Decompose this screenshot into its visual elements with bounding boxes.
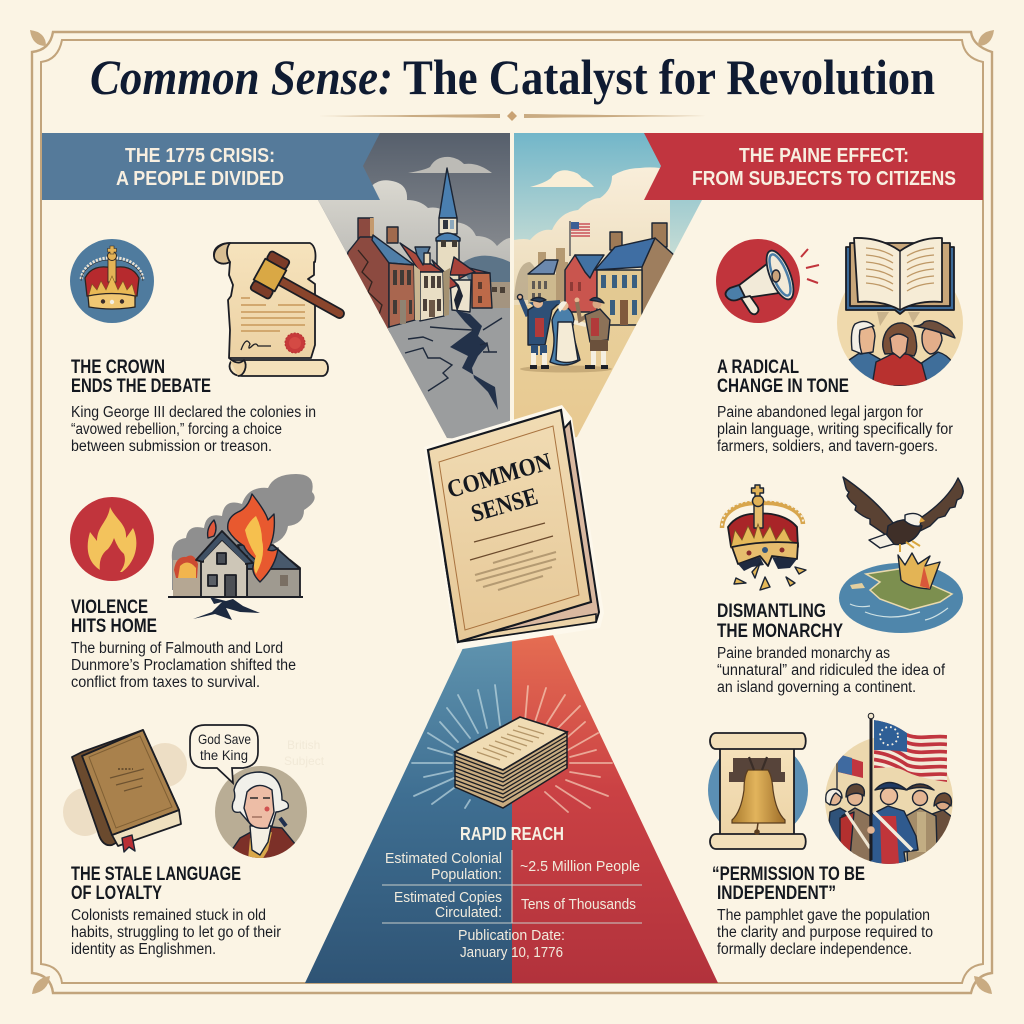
background houses [514, 262, 535, 300]
icon: colonial soldiers with flag [825, 712, 953, 864]
ghost label: British [287, 738, 320, 752]
stat table: Population: [431, 866, 502, 883]
icon: crown badge [70, 239, 154, 323]
icon: open book with common readers [837, 238, 963, 386]
heading [717, 601, 843, 642]
heading: CHANGE IN TONE [717, 376, 849, 397]
distant houses [470, 282, 510, 308]
icon: liberty bell scroll [708, 733, 808, 849]
three cheering colonists [518, 294, 612, 372]
heading: HITS HOME [71, 616, 157, 637]
text block: “avowed rebellion,” forcing a choice [71, 421, 282, 438]
radiating rays [412, 685, 612, 812]
heading: ENDS THE DEBATE [71, 376, 211, 397]
text block [717, 645, 946, 696]
heading [71, 357, 211, 397]
stat table: Circulated: [435, 904, 502, 921]
text block: an island governing a continent. [717, 679, 916, 696]
heading: OF LOYALTY [71, 883, 162, 904]
ghost label [284, 738, 325, 768]
central pamphlet [424, 405, 604, 650]
panel: rapid reach pyramid [305, 635, 718, 983]
speech bubble: the King [200, 747, 248, 763]
heading: THE CROWN [71, 357, 165, 378]
heading: A RADICAL [717, 357, 799, 378]
stat table: Estimated Copies [394, 889, 502, 906]
small storm cloud [408, 157, 492, 173]
text block: Paine branded monarchy as [717, 645, 890, 662]
icon: dusty old book [63, 730, 187, 852]
banner: the 1775 crisis: A PEOPLE DIVIDED [116, 167, 284, 190]
heading: “PERMISSION TO BE [712, 864, 865, 885]
icon: burning house [168, 474, 315, 620]
panel: a radical change in tone [716, 238, 963, 455]
icon: shattered crown [722, 485, 806, 590]
text block: the clarity and purpose required to [717, 924, 933, 941]
stat heading: RAPID REACH [460, 824, 564, 844]
heading: INDEPENDENT” [717, 883, 836, 904]
text block [71, 404, 316, 455]
title divider ornament [318, 111, 706, 121]
panel: the stale language of loyalty [63, 725, 325, 958]
ground crack [450, 310, 498, 410]
banner: the paine effect: FROM SUBJECTS TO CITIZENS [692, 167, 956, 190]
stat table: Estimated Colonial [385, 850, 502, 867]
text block: formally declare independence. [717, 941, 912, 958]
text block: farmers, soldiers, and tavern-goers. [717, 438, 938, 455]
stat table: Publication Date: [458, 927, 565, 944]
text block: “unnatural” and ridiculed the idea of [717, 662, 946, 679]
scene: divided town under storm [318, 133, 510, 450]
banner: the 1775 crisis: THE 1775 CRISIS: [125, 144, 275, 167]
small fair cloud [530, 170, 594, 187]
heading: VIOLENCE [71, 597, 148, 618]
text block [717, 404, 953, 455]
text block [71, 640, 296, 691]
stat table [382, 850, 642, 961]
pamphlet title: COMMON [444, 448, 555, 504]
big house [610, 232, 622, 250]
heading: DISMANTLING [717, 601, 826, 622]
icon: megaphone badge [716, 239, 819, 323]
cracked central building [450, 280, 471, 312]
panel: violence hits home [70, 474, 315, 691]
scene: united town under clear sky [514, 133, 704, 455]
icon: stack of pamphlets [455, 717, 567, 808]
banner: the 1775 crisis [42, 133, 380, 200]
text block: conflict from taxes to survival. [71, 674, 260, 691]
text block: plain language, writing specifically for [717, 421, 953, 438]
island [839, 553, 963, 633]
panel: permission to be independent [708, 713, 956, 958]
pamphlet title [444, 448, 555, 528]
text block [71, 907, 281, 958]
title [90, 49, 935, 105]
text block: The burning of Falmouth and Lord [71, 640, 283, 657]
banner: the paine effect: THE PAINE EFFECT: [739, 144, 909, 167]
heading [717, 357, 849, 397]
text block [717, 907, 933, 958]
heading: THE STALE LANGUAGE [71, 864, 241, 885]
ghost label: Subject [284, 754, 325, 768]
church steeple [436, 168, 460, 281]
text block: identity as Englishmen. [71, 941, 216, 958]
flag on pole [570, 221, 590, 256]
text block: between submission or treason. [71, 438, 272, 455]
red building [565, 255, 597, 312]
text block: habits, struggling to let go of their [71, 924, 281, 941]
panel: dismantling the monarchy [717, 477, 963, 696]
brick house [358, 218, 373, 240]
title: Common Sense: [90, 49, 393, 105]
icon: flame badge [70, 497, 154, 581]
text block: Paine abandoned legal jargon for [717, 404, 923, 421]
heading [71, 597, 157, 637]
speech bubble [190, 725, 258, 783]
stat table: January 10, 1776 [460, 944, 563, 961]
text block: The pamphlet gave the population [717, 907, 930, 924]
stat table: ~2.5 Million People [520, 858, 640, 875]
text block: Dunmore’s Proclamation shifted the [71, 657, 296, 674]
icon: bald eagle over island [839, 477, 963, 633]
text block: King George III declared the colonies in [71, 404, 316, 421]
text block: Colonists remained stuck in old [71, 907, 266, 924]
waving flag [874, 720, 947, 782]
title: The Catalyst for Revolution [403, 49, 935, 105]
heading [712, 864, 865, 904]
cream house [400, 243, 443, 272]
icon: king portrait [215, 766, 307, 860]
banner: the paine effect [644, 133, 983, 200]
panel: the crown ends the debate [70, 239, 354, 455]
icon: decree scroll with gavel [214, 243, 354, 376]
heading [71, 864, 241, 904]
ground [388, 328, 453, 438]
heading: THE MONARCHY [717, 621, 843, 642]
pamphlet title: SENSE [468, 483, 541, 528]
stat table: Tens of Thousands [521, 896, 636, 913]
speech bubble: God Save [198, 731, 251, 747]
